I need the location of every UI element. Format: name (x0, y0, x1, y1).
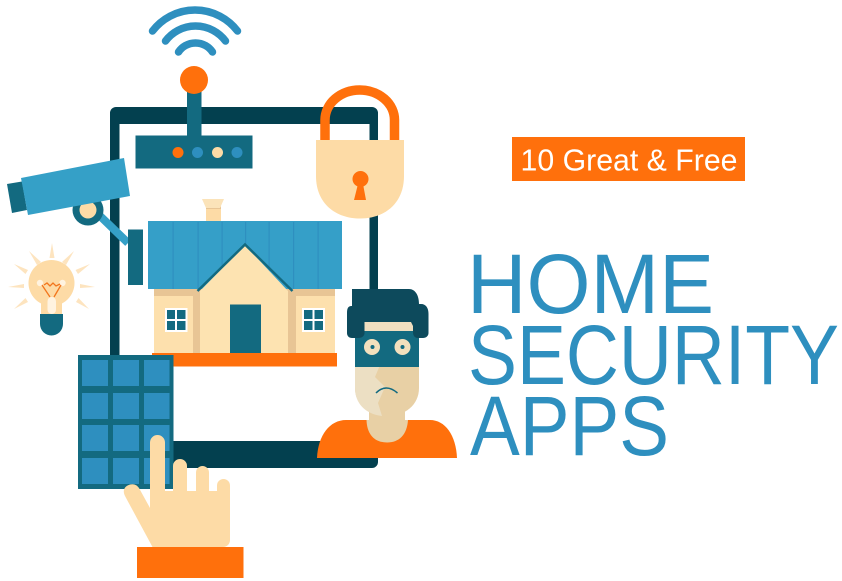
title: HOME (467, 237, 714, 331)
tablet frame (110, 107, 378, 468)
mask (355, 331, 419, 367)
icon: security camera (7, 158, 143, 285)
illustration: house (148, 199, 342, 366)
forehead (360, 320, 415, 333)
icon: padlock (316, 90, 404, 219)
sleeve cuff (137, 547, 244, 578)
face (355, 365, 419, 416)
figure: burglar (317, 289, 457, 458)
hair (347, 289, 428, 338)
keypad (78, 355, 174, 489)
right window (302, 308, 325, 332)
chimney (202, 199, 224, 223)
door (230, 304, 261, 354)
subtitle badge: 10 Great & Free (520, 142, 738, 178)
house walls (154, 244, 335, 354)
left window (165, 308, 188, 332)
title: APPS (470, 379, 669, 473)
shirt (317, 420, 457, 458)
icon: light bulb (8, 243, 95, 336)
title (467, 237, 839, 473)
icon: pointing hand (124, 435, 244, 578)
icon: wifi signal (152, 10, 238, 52)
icon: router (136, 66, 252, 168)
roof (148, 221, 342, 289)
neck (366, 405, 408, 442)
house base (152, 353, 337, 366)
